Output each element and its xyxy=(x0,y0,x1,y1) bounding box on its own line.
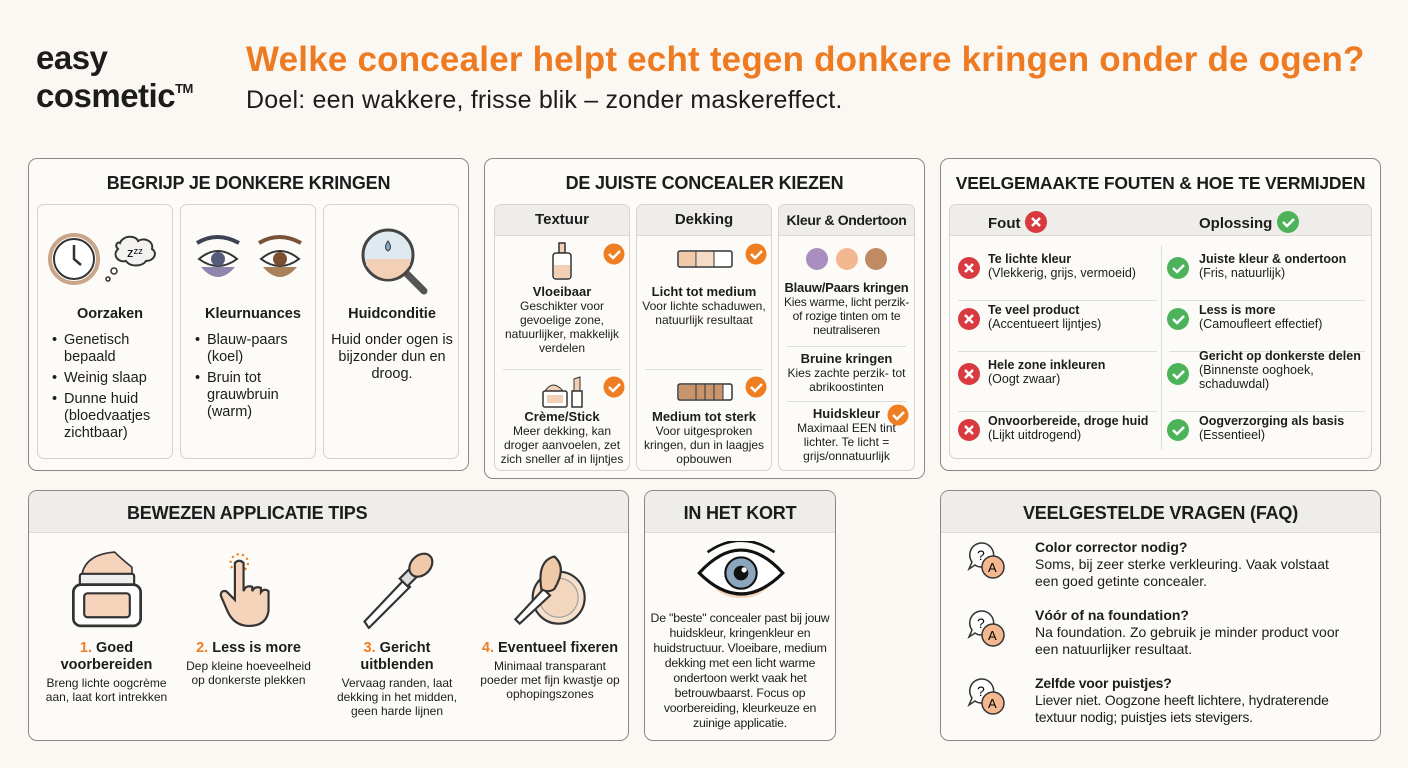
icon: check xyxy=(604,244,624,264)
tip 3: 3. Gericht uitblenden xyxy=(360,640,434,673)
text xyxy=(52,306,150,441)
faq 1: A xyxy=(988,560,997,575)
icon: magnifier xyxy=(362,228,428,294)
faq 2 xyxy=(968,607,1340,657)
text: Huidconditie xyxy=(348,306,436,322)
icon: brush xyxy=(363,552,434,629)
icon: eye xyxy=(697,541,785,598)
header: oplossing xyxy=(1199,211,1299,233)
card: oorzaken xyxy=(37,204,173,459)
tip 3: Vervaag randen, laat dekking in het midden, geen harde lijnen xyxy=(337,676,457,718)
text xyxy=(196,306,301,420)
icon: colour dots xyxy=(806,248,887,270)
faq 2: Na foundation. Zo gebruik je minder product voor xyxy=(1035,624,1339,640)
faq 2: A xyxy=(988,628,997,643)
table: (Lijkt uitdrogend) xyxy=(988,428,1081,442)
header: oplossing: Oplossing xyxy=(1199,215,1272,232)
logo: easy xyxy=(36,39,107,76)
column: textuur: Geschikter voor gevoelige zone, natuurlijker, makkelijk verdelen xyxy=(505,299,619,355)
heading: BEWEZEN APPLICATIE TIPS xyxy=(127,503,367,523)
column: kleur & ondertoon: Kleur & Ondertoon xyxy=(786,212,907,228)
column: textuur: Vloeibaar xyxy=(533,284,591,299)
faq 3: Liever niet. Oogzone heeft lichtere, hydraterende xyxy=(1035,692,1329,708)
table: (Fris, natuurlijk) xyxy=(1199,266,1285,280)
header: fout xyxy=(988,211,1047,233)
tip 2: Dep kleine hoeveelheid op donkerste plekken xyxy=(186,659,311,687)
column: kleur & ondertoon: Blauw/Paars kringen xyxy=(784,280,909,295)
table: (Binnenste ooghoek, xyxy=(1199,363,1314,377)
faq 3: Zelfde voor puistjes? xyxy=(1035,675,1172,691)
table: Gericht op donkerste delen xyxy=(1199,349,1361,363)
text: Genetisch bepaald xyxy=(64,332,129,365)
tip 1: 1. Goed voorbereiden xyxy=(61,640,152,673)
column: textuur: Crème/Stick xyxy=(524,409,600,424)
table: schaduwdal) xyxy=(1199,377,1269,391)
tip 3 xyxy=(337,552,457,718)
faq 2: Vóór of na foundation? xyxy=(1035,607,1189,623)
table: Hele zone inkleuren xyxy=(988,358,1105,372)
logo xyxy=(36,39,193,114)
text: Kleurnuances xyxy=(205,306,301,322)
faq 3: A xyxy=(988,696,997,711)
faq 2: ? xyxy=(977,615,985,631)
tip 2 xyxy=(186,553,311,687)
text: Bruin tot grauwbruin (warm) xyxy=(207,370,279,420)
column: dekking xyxy=(636,204,772,471)
table xyxy=(949,204,1372,459)
icon: eyes xyxy=(196,235,302,277)
icon: swatch light xyxy=(677,250,733,268)
tip 4 xyxy=(480,555,620,701)
faq 1: een goed getinte concealer. xyxy=(1035,573,1207,589)
panel: bewezen applicatie tips xyxy=(28,490,629,741)
faq 1: ? xyxy=(977,547,985,563)
table: (Essentieel) xyxy=(1199,428,1265,442)
column: textuur xyxy=(494,204,630,471)
column: kleur & ondertoon: Kies warme, licht perzik- of rozige tinten om te neutraliseren xyxy=(784,295,909,337)
card: kleurnuances xyxy=(180,204,316,459)
panel: faq xyxy=(940,490,1381,741)
faq 1: Soms, bij zeer sterke verkleuring. Vaak volstaat xyxy=(1035,556,1329,572)
text: Weinig slaap xyxy=(64,370,147,386)
panel: in het kort xyxy=(644,490,836,741)
table: Te lichte kleur xyxy=(988,252,1071,266)
fout rows xyxy=(958,252,1157,442)
logo: cosmeticTM xyxy=(36,77,193,114)
tip 2: 2. Less is more xyxy=(196,640,301,656)
faq 1: Color corrector nodig? xyxy=(1035,539,1187,555)
header: fout: Fout xyxy=(988,215,1020,232)
faq 3: textuur nodig; puistjes iets stevigers. xyxy=(1035,709,1253,725)
table: (Oogt zwaar) xyxy=(988,372,1060,386)
heading: VEELGESTELDE VRAGEN (FAQ) xyxy=(1023,503,1298,523)
title: Welke concealer helpt echt tegen donkere kringen onder de ogen? xyxy=(246,40,1365,79)
column: kleur & ondertoon: Bruine kringen xyxy=(801,351,892,366)
table: (Accentueert lijntjes) xyxy=(988,317,1101,331)
tip 1: Breng lichte oogcrème aan, laat kort intrekken xyxy=(46,676,167,704)
column: textuur: Meer dekking, kan droger aanvoelen, zet zich sneller af in lijntjes xyxy=(501,424,623,466)
oplossing rows xyxy=(1167,252,1365,442)
table: Less is more xyxy=(1199,303,1275,317)
summary text: De "beste" concealer past bij jouw huidskleur, kringenkleur en huidstructuur. Vloeibare, medium dekking met een licht warme ondertoon werkt vaak het betrouwbaarst. Focus op voorbereiding, kleurkeuze en zuinige applicatie. xyxy=(651,611,829,730)
text xyxy=(331,306,453,382)
icon: powder brush xyxy=(514,555,586,626)
table: Oogverzorging als basis xyxy=(1199,414,1344,428)
icon: swatch strong xyxy=(677,383,733,401)
column: dekking: Medium tot sterk xyxy=(652,409,756,424)
table: Onvoorbereide, droge huid xyxy=(988,414,1148,428)
table: (Vlekkerig, grijs, vermoeid) xyxy=(988,266,1136,280)
icon: cream and stick xyxy=(542,376,583,408)
panel: veelgemaakte fouten xyxy=(940,158,1381,471)
column: textuur: Textuur xyxy=(535,211,589,228)
column: kleur & ondertoon: Kies zachte perzik- tot abrikoostinten xyxy=(787,366,906,394)
icon: jar xyxy=(72,551,142,628)
faq 3: ? xyxy=(977,683,985,699)
column: dekking: Voor lichte schaduwen, natuurlijk resultaat xyxy=(642,299,766,327)
faq 3 xyxy=(967,675,1329,725)
column: kleur & ondertoon: Maximaal EEN tint lichter. Te licht = grijs/onnatuurlijk xyxy=(797,421,896,463)
column: kleur & ondertoon xyxy=(778,204,915,471)
icon: bottle xyxy=(552,242,572,280)
heading: BEGRIJP JE DONKERE KRINGEN xyxy=(107,173,390,193)
card: huidconditie xyxy=(323,204,459,459)
panel: begrijp je donkere kringen xyxy=(28,158,469,471)
column: dekking: Dekking xyxy=(675,211,733,228)
text: Dunne huid (bloedvaatjes zichtbaar) xyxy=(64,391,150,441)
heading: IN HET KORT xyxy=(684,503,796,523)
text: Oorzaken xyxy=(77,306,143,322)
faq 2: een natuurlijker resultaat. xyxy=(1035,641,1192,657)
column: dekking: Licht tot medium xyxy=(652,284,756,299)
icon: finger xyxy=(220,553,270,627)
tip 4: Minimaal transparant poeder met fijn kwastje op ophopingszones xyxy=(480,659,620,701)
tip 1 xyxy=(46,551,167,704)
text: Huid onder ogen is bijzonder dun en droog. xyxy=(331,332,453,382)
column: kleur & ondertoon: Huidskleur xyxy=(813,406,880,421)
panel: de juiste concealer kiezen xyxy=(484,158,925,479)
text: Blauw-paars (koel) xyxy=(207,332,288,365)
table: (Camoufleert effectief) xyxy=(1199,317,1322,331)
column: dekking: Voor uitgesproken kringen, dun in laagjes opbouwen xyxy=(644,424,764,466)
heading: DE JUISTE CONCEALER KIEZEN xyxy=(566,173,843,193)
table: Juiste kleur & ondertoon xyxy=(1199,252,1346,266)
faq 1 xyxy=(967,539,1329,589)
table: Te veel product xyxy=(988,303,1079,317)
tip 4: 4. Eventueel fixeren xyxy=(482,640,618,656)
subtitle: Doel: een wakkere, frisse blik – zonder maskereffect. xyxy=(246,86,843,114)
icon: clock and sleep: zᶻᶻ xyxy=(127,245,143,260)
heading: VEELGEMAAKTE FOUTEN & HOE TE VERMIJDEN xyxy=(956,173,1365,193)
icon: clock and sleep xyxy=(48,233,156,285)
